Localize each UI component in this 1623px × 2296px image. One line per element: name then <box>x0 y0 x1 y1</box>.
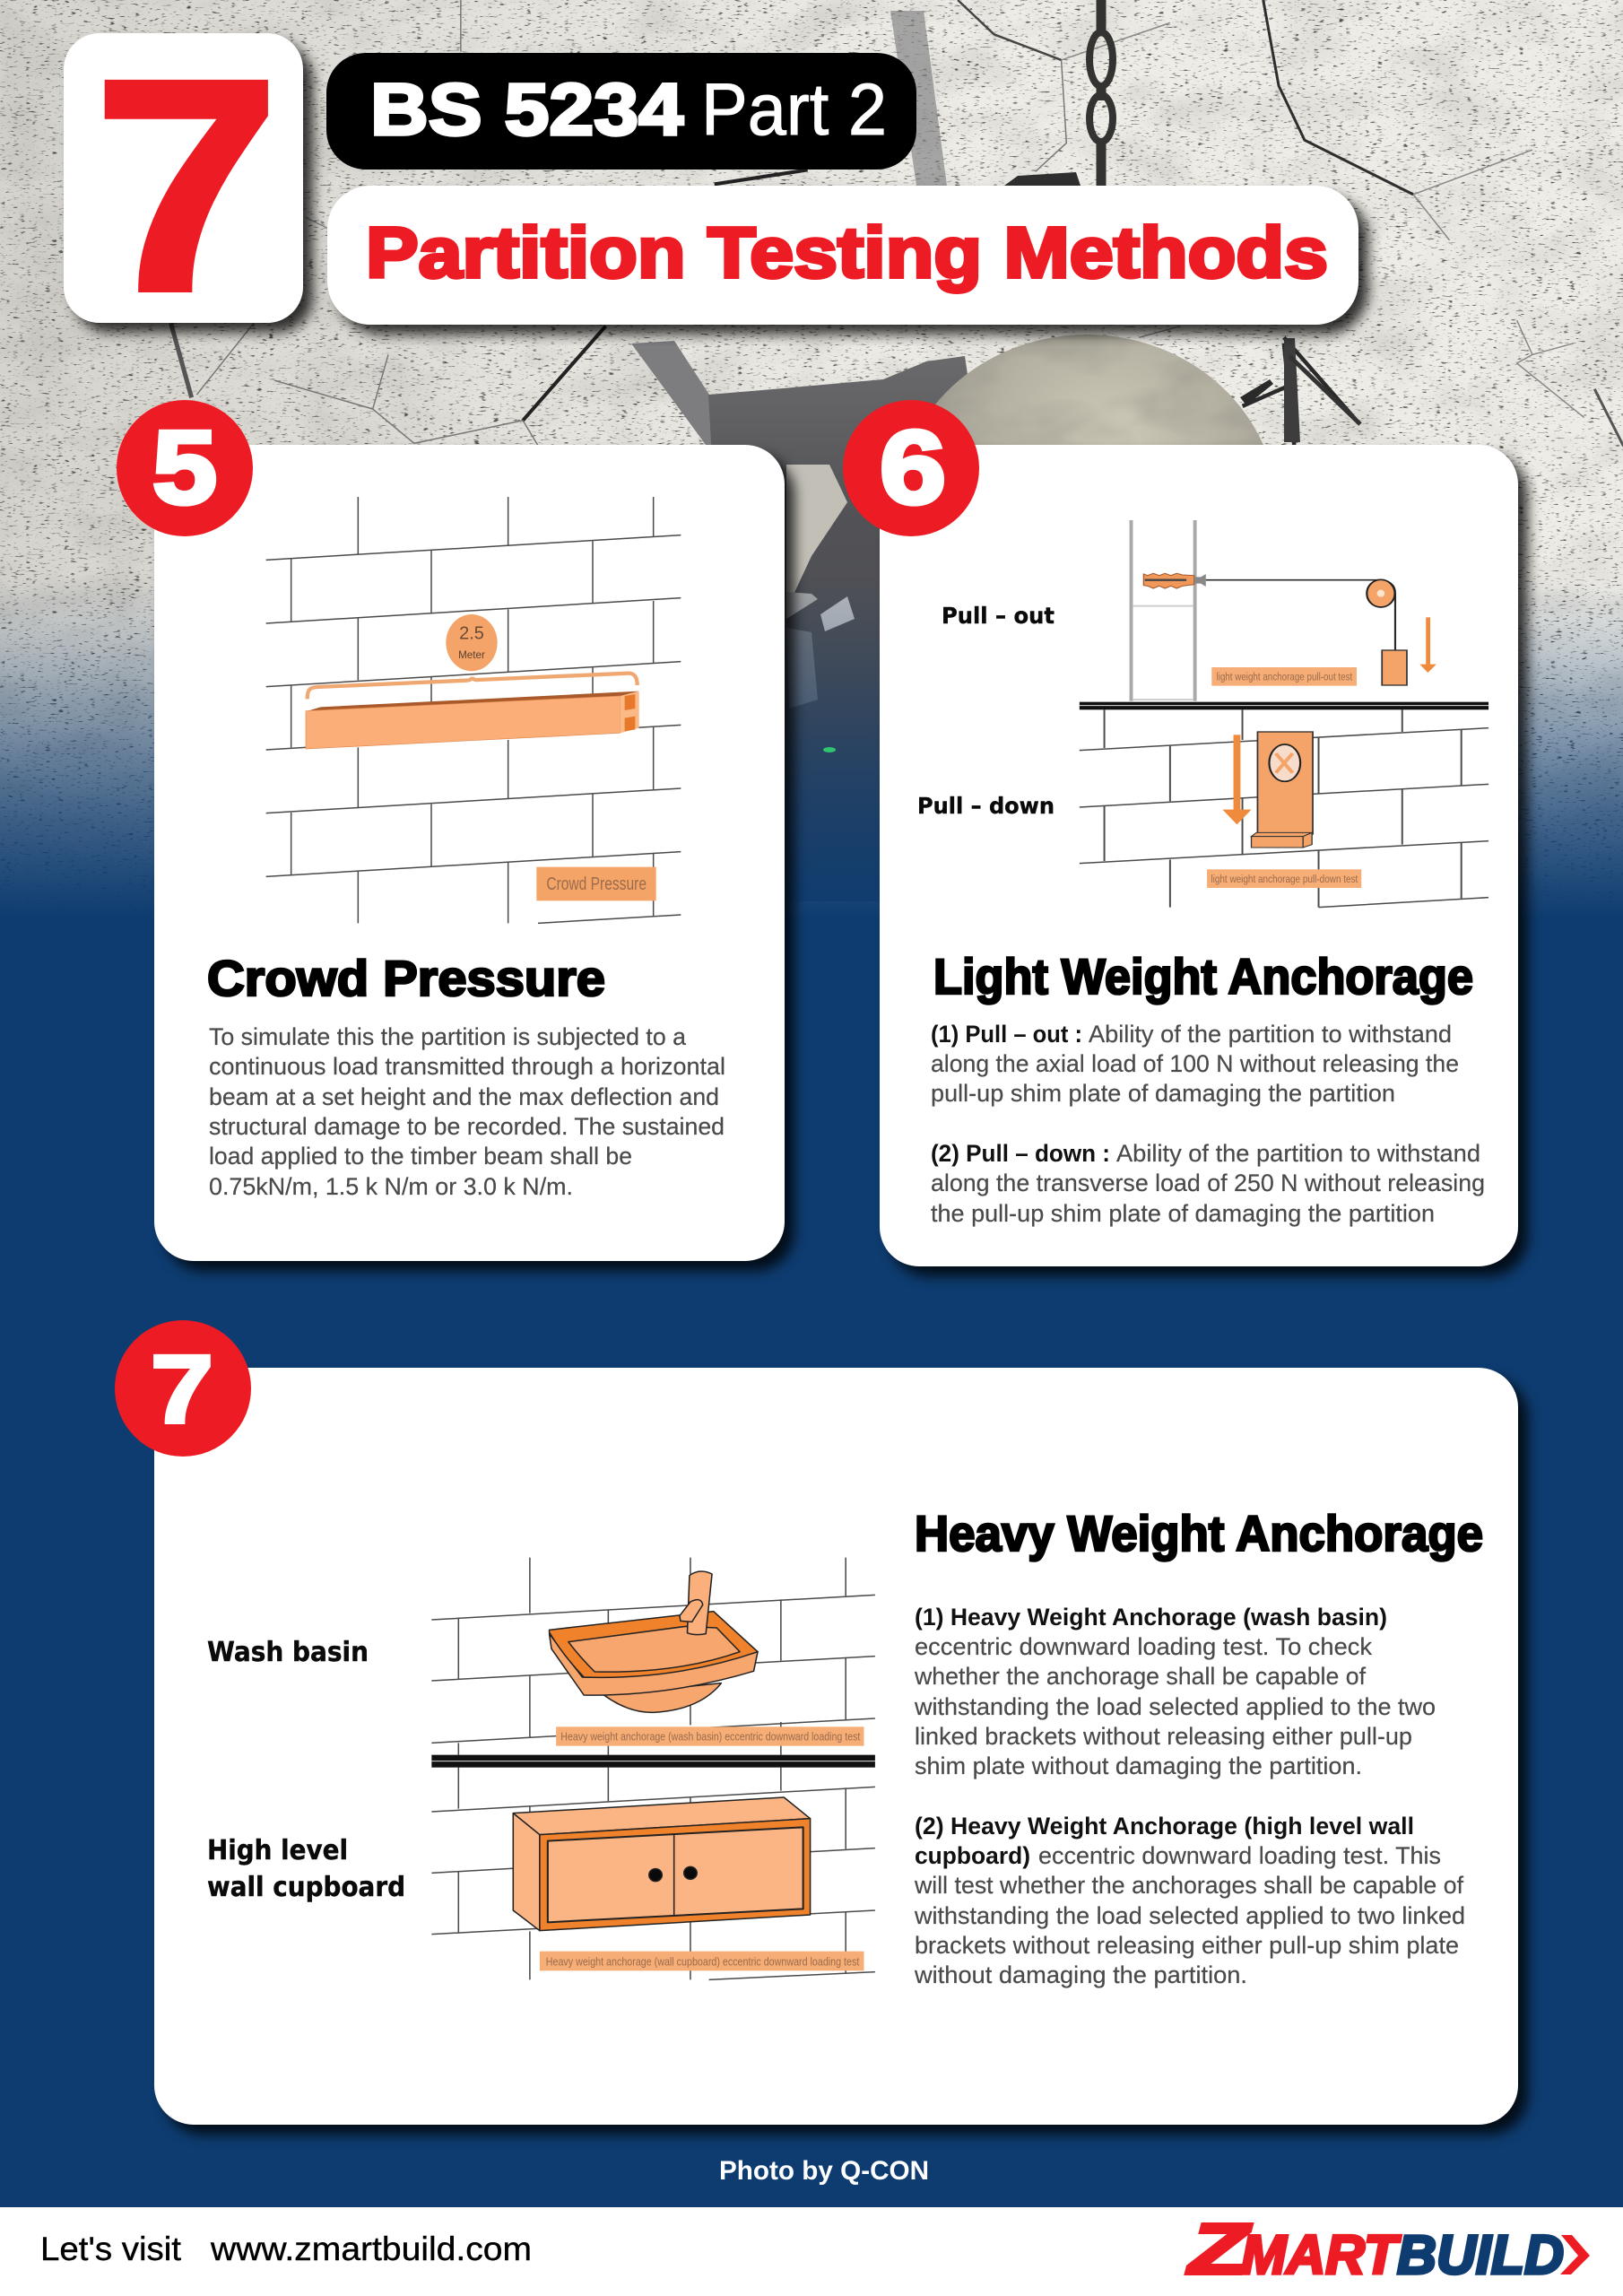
label: pull-out: Pull – out <box>942 603 1055 629</box>
body text: linked brackets without releasing either pull-up <box>915 1723 1412 1750</box>
body text <box>914 1604 1465 1988</box>
footer bar <box>0 2207 1623 2296</box>
body text: load applied to the timber beam shall be <box>209 1143 632 1170</box>
pull-down test: light weight anchorage pull-down test <box>1211 873 1358 885</box>
title: Partition Testing Methods <box>327 186 1358 325</box>
illustration: beam on brick wall <box>266 497 681 923</box>
badge: number 6: 6 <box>880 409 946 526</box>
label: high level wall cupboard: High level <box>207 1835 348 1866</box>
website link text: Let's visit <box>40 2231 182 2267</box>
body text: without damaging the partition. <box>914 1961 1247 1988</box>
body text: structural damage to be recorded. The sustained <box>209 1113 725 1140</box>
body text: whether the anchorage shall be capable of <box>914 1663 1367 1690</box>
logo: Zmartbuild: MART <box>1241 2224 1402 2285</box>
body text: shim plate without damaging the partition. <box>915 1752 1362 1779</box>
body text: continuous load transmitted through a horizontal <box>209 1053 725 1080</box>
heading: Heavy Weight Anchorage <box>915 1505 1483 1561</box>
body text <box>931 1021 1485 1227</box>
icon: wrecking ball chain <box>1089 0 1113 186</box>
website link text: www.zmartbuild.com <box>210 2231 532 2267</box>
pull-down test <box>1080 709 1488 908</box>
icon: wash basin <box>550 1571 758 1712</box>
badge: number 6 <box>843 400 979 536</box>
badge: number 7: 7 <box>151 1335 213 1443</box>
body text: along the axial load of 100 N without releasing the <box>931 1050 1459 1077</box>
heading: Light Weight Anchorage <box>933 948 1473 1004</box>
pull-out test <box>1132 520 1436 701</box>
header: standard name pill <box>326 53 916 170</box>
logo: Zmartbuild: BUILD <box>1397 2224 1564 2285</box>
body text: along the transverse load of 250 N without releasing <box>931 1170 1485 1196</box>
body text: (2) Heavy Weight Anchorage (high level wall <box>915 1813 1414 1839</box>
body text: brackets without releasing either pull-up shim plate <box>915 1932 1459 1959</box>
header: standard name pill: BS 5234 <box>370 69 683 151</box>
body text: (2) Pull – down : <box>931 1140 1110 1167</box>
body text: the pull-up shim plate of damaging the partition <box>931 1200 1435 1227</box>
website link text <box>40 2231 532 2267</box>
panel: light weight anchorage <box>880 445 1518 1266</box>
panel: crowd pressure <box>154 445 785 1261</box>
body text: eccentric downward loading test. To check <box>915 1633 1373 1660</box>
header: big number 7 tile <box>64 18 303 354</box>
photo credit: Photo by Q-CON <box>719 2156 929 2186</box>
body text: (1) Heavy Weight Anchorage (wash basin) <box>915 1604 1387 1631</box>
body text: cupboard) <box>915 1842 1030 1869</box>
title: Partition Testing Methods: Partition Testing Methods <box>366 213 1328 292</box>
dimension badge: 2.5 meter <box>446 614 498 671</box>
body text <box>209 1023 725 1200</box>
wedge of broken wall above the title <box>890 11 947 186</box>
illustration: pull-out and pull-down tests <box>1080 520 1488 908</box>
icon: wrecking ball <box>935 335 1263 445</box>
illustration: wash basin and cupboard: Heavy weight anchorage (wash basin) eccentric downward loading test <box>560 1730 861 1744</box>
body text: 0.75kN/m, 1.5 k N/m or 3.0 k N/m. <box>209 1173 573 1200</box>
heading: Crowd Pressure <box>207 950 605 1006</box>
body text: Ability of the partition to withstand <box>1089 1021 1452 1048</box>
body text: pull-up shim plate of damaging the partition <box>931 1080 1395 1107</box>
background: cracked concrete fading to navy <box>0 0 1623 900</box>
body text: withstanding the load selected applied to the two <box>914 1693 1436 1720</box>
body text: eccentric downward loading test. This <box>1038 1842 1441 1869</box>
logo: Zmartbuild <box>1186 2209 1590 2289</box>
label: high level wall cupboard: wall cupboard <box>207 1872 405 1903</box>
caption tag: Crowd Pressure <box>546 874 647 894</box>
body text: beam at a set height and the max deflection and <box>209 1083 719 1110</box>
logo: Zmartbuild: Z <box>1186 2209 1252 2289</box>
dimension badge: 2.5 meter: Meter <box>458 649 485 661</box>
dimension badge: 2.5 meter: 2.5 <box>459 624 484 644</box>
label: pull-down: Pull – down <box>917 793 1055 819</box>
body text: (1) Pull – out : <box>931 1021 1082 1048</box>
body text: Ability of the partition to withstand <box>1116 1140 1480 1167</box>
header: big number 7 tile: 7 <box>93 18 280 354</box>
body text: will test whether the anchorages shall be capable of <box>914 1872 1464 1899</box>
illustration: wash basin and cupboard <box>431 1558 875 1979</box>
body text: withstanding the load selected applied to two linked <box>914 1902 1465 1929</box>
label: wash basin: Wash basin <box>207 1637 369 1668</box>
cracks in the wall <box>171 0 1623 446</box>
broken hole in wall <box>631 341 986 901</box>
caption tag <box>536 867 656 900</box>
badge: number 5: 5 <box>152 409 217 526</box>
body text: To simulate this the partition is subjected to a <box>209 1023 686 1050</box>
badge: number 7 <box>115 1320 251 1457</box>
pull-out test: light weight anchorage pull-out test <box>1216 670 1352 683</box>
header: standard name pill: Part 2 <box>701 69 887 151</box>
icon: wall cupboard <box>513 1797 811 1931</box>
badge: number 5 <box>117 400 253 536</box>
illustration: wash basin and cupboard: Heavy weight anchorage (wall cupboard) eccentric downward loading test <box>546 1955 860 1968</box>
label: high level wall cupboard <box>207 1835 405 1903</box>
panel: heavy weight anchorage <box>154 1368 1518 2125</box>
